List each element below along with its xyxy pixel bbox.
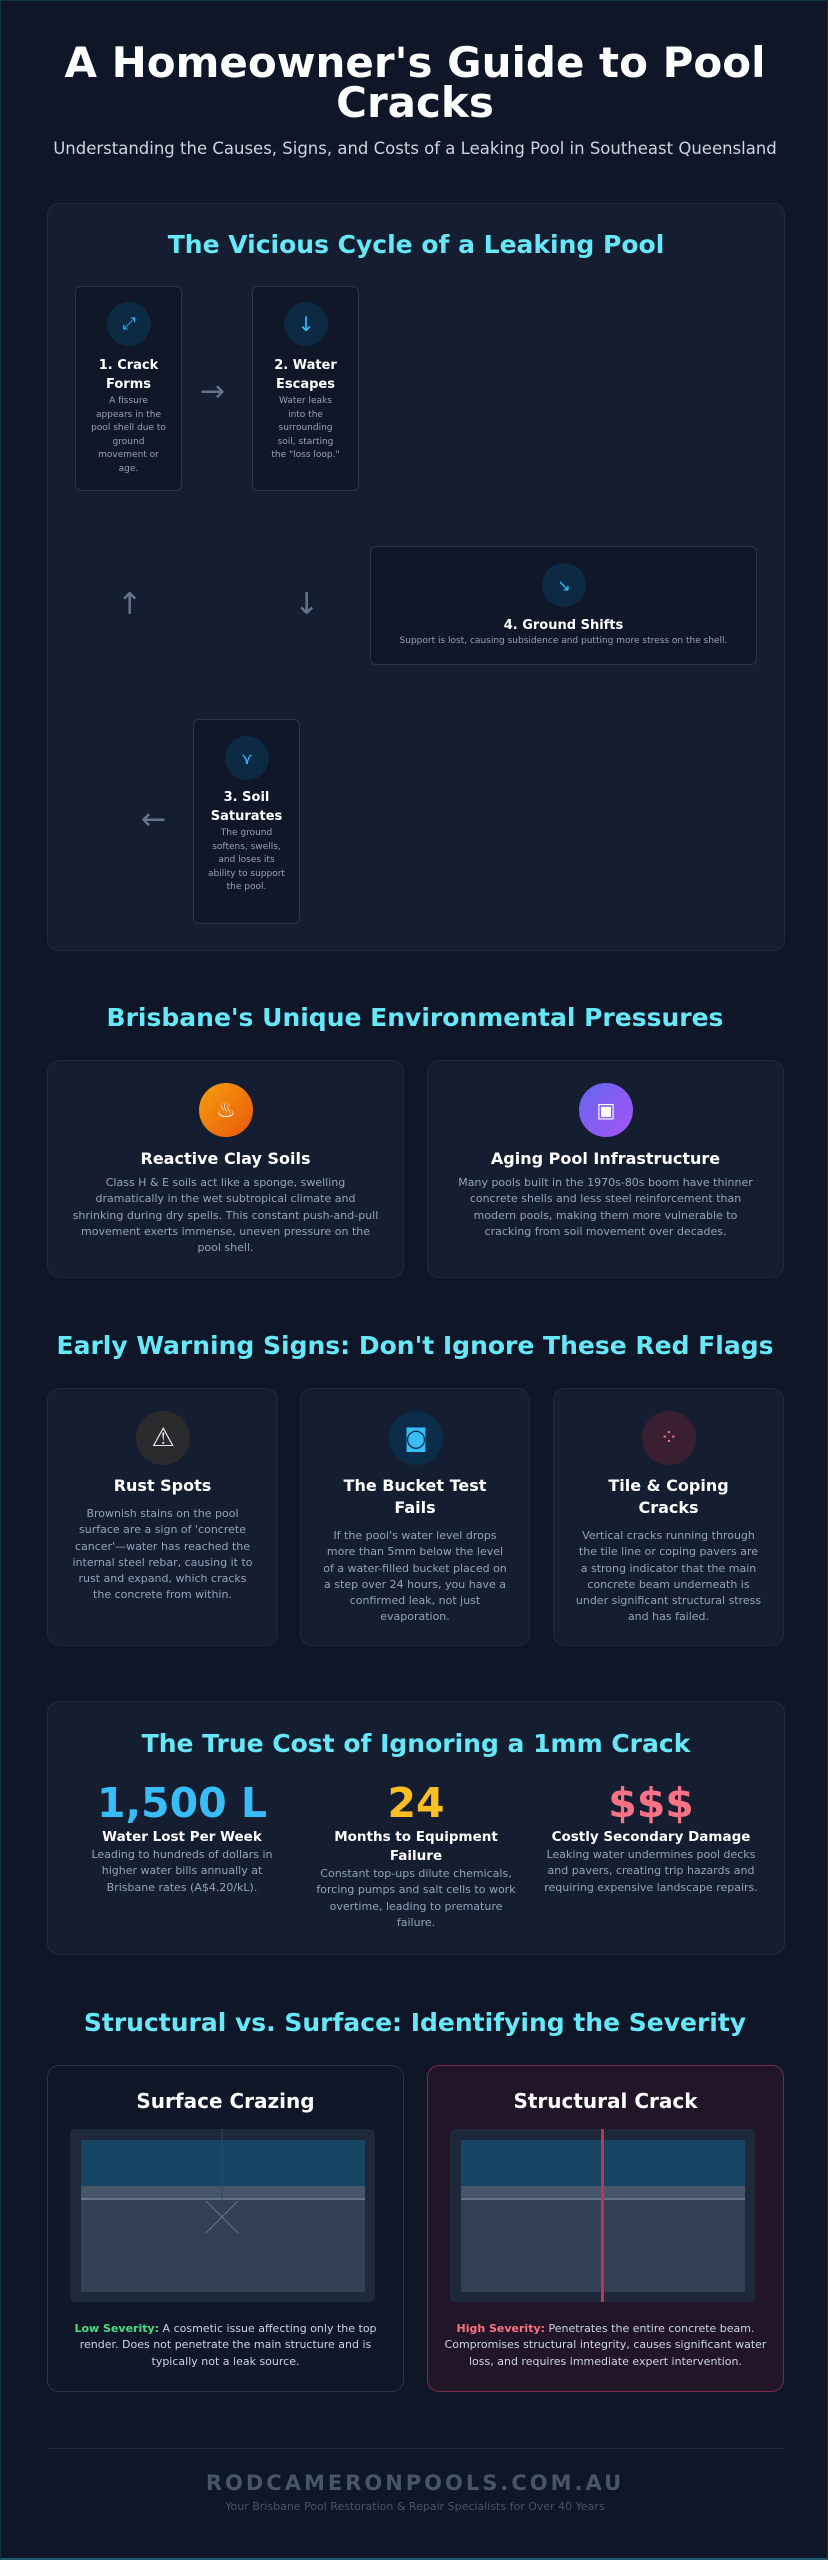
- card: structural crack: High Severity: Penetrates the entire concrete beam. Compromises structural integrity, causes significant water loss, and requires immediate expert intervention.: [445, 2322, 766, 2368]
- arrow down: ↓: [294, 587, 319, 622]
- arrow left: ←: [141, 802, 166, 837]
- icon: bucket: [389, 1411, 443, 1465]
- card: tile cracks: Vertical cracks running through the tile line or coping pavers are a strong indicator that the main concrete beam underneath is under significant structural stress and has failed.: [576, 1529, 761, 1623]
- step 3 card: The ground softens, swells, and loses its ability to support the pool.: [208, 828, 285, 892]
- card: reactive clay soils: Reactive Clay Soils: [140, 1149, 310, 1168]
- icon: trending down: [542, 563, 586, 607]
- card: surface crazing: Surface Crazing: [136, 2089, 315, 2113]
- icon: tiles: ⁘: [660, 1426, 678, 1450]
- heading: environmental pressures: Brisbane's Unique Environmental Pressures: [107, 1003, 723, 1032]
- card: surface crazing: [47, 2065, 404, 2392]
- subtitle: Understanding the Causes, Signs, and Costs of a Leaking Pool in Southeast Queensland: [53, 139, 777, 158]
- card: aging infrastructure: [427, 1060, 784, 1278]
- stat: water lost: 1,500 L: [97, 1779, 267, 1827]
- card: structural crack: Structural Crack: [513, 2089, 698, 2113]
- heading: vicious cycle: The Vicious Cycle of a Leaking Pool: [168, 230, 664, 259]
- card: reactive clay soils: [47, 1060, 404, 1278]
- icon: tiles: [642, 1411, 696, 1465]
- stat: secondary damage: Costly Secondary Damage: [552, 1829, 750, 1845]
- stat: water lost: [91, 1779, 273, 1894]
- icon: warning: [136, 1411, 190, 1465]
- stat: water lost: Water Lost Per Week: [102, 1829, 262, 1845]
- card: surface crazing: Low Severity: A cosmetic issue affecting only the top render. Does not penetrate the main structure and is typically not a leak source.: [74, 2322, 377, 2368]
- icon: fire: ♨: [216, 1098, 236, 1122]
- panel: true cost: [47, 1701, 785, 1955]
- stat: equipment failure: Months to Equipment Failure: [334, 1829, 498, 1864]
- heading: severity: Structural vs. Surface: Identifying the Severity: [84, 2008, 746, 2037]
- diagram: surface crazing: [70, 2129, 375, 2302]
- icon: fire: [199, 1083, 253, 1137]
- icon: down arrow: [284, 302, 328, 346]
- icon: down arrow: ↓: [298, 312, 314, 336]
- card: rust spots: Brownish stains on the pool surface are a sign of 'concrete cancer'—water has reached the internal steel rebar, causing it to rust and expand, which cracks the concrete from within.: [72, 1507, 253, 1601]
- card: rust spots: Rust Spots: [114, 1476, 211, 1495]
- card: structural crack: [427, 2065, 784, 2392]
- icon: warning: ⚠: [151, 1423, 175, 1453]
- panel: vicious cycle: [47, 203, 785, 951]
- stat: equipment failure: 24: [387, 1779, 445, 1827]
- heading: warning signs: Early Warning Signs: Don't Ignore These Red Flags: [56, 1331, 773, 1360]
- arrow right: →: [200, 374, 225, 409]
- icon: calendar: ▣: [597, 1098, 615, 1122]
- icon: expand: [107, 302, 151, 346]
- icon: expand: ⤢: [122, 314, 136, 334]
- step 4 card: [370, 546, 757, 665]
- title: A Homeowner's Guide to Pool Cracks: [64, 38, 766, 127]
- footer tagline: Your Brisbane Pool Restoration & Repair Specialists for Over 40 Years: [225, 2500, 605, 2513]
- card: bucket test: [300, 1388, 530, 1646]
- icon: split: ⋎: [241, 748, 253, 768]
- card: bucket test: The Bucket Test Fails: [344, 1476, 486, 1517]
- stat: equipment failure: Constant top-ups dilute chemicals, forcing pumps and salt cells to work overtime, leading to premature failure.: [316, 1867, 516, 1929]
- step 1 card: A fissure appears in the pool shell due to ground movement or age.: [91, 396, 166, 474]
- stat: secondary damage: Leaking water undermines pool decks and pavers, creating trip hazards and requiring expensive landscape repairs.: [544, 1848, 758, 1894]
- step 4 card: 4. Ground Shifts: [504, 618, 623, 633]
- step 4 card: Support is lost, causing subsidence and putting more stress on the shell.: [400, 636, 727, 646]
- arrow up: ↑: [117, 587, 142, 622]
- diagram: structural crack: [450, 2129, 755, 2302]
- step 2 card: Water leaks into the surrounding soil, starting the "loss loop.": [271, 396, 340, 460]
- card: tile cracks: [553, 1388, 784, 1646]
- step 3 card: [193, 719, 300, 924]
- step 3 card: 3. Soil Saturates: [211, 790, 282, 824]
- stat: water lost: Leading to hundreds of dollars in higher water bills annually at Brisbane rates (A$4.20/kL).: [91, 1848, 273, 1894]
- card: rust spots: [47, 1388, 278, 1646]
- icon: bucket: ◙: [404, 1424, 428, 1452]
- card: reactive clay soils: Class H & E soils act like a sponge, swelling dramatically in the wet subtropical climate and shrinking during dry spells. This constant push-and-pull movement exerts immense, uneven pressure on the pool shell.: [73, 1176, 378, 1254]
- card: tile cracks: Tile & Coping Cracks: [608, 1476, 729, 1517]
- step 2 card: 2. Water Escapes: [274, 358, 337, 392]
- icon: calendar: [579, 1083, 633, 1137]
- card: aging infrastructure: Aging Pool Infrastructure: [491, 1149, 720, 1168]
- stat: secondary damage: $$$: [608, 1779, 694, 1827]
- icon: split: [225, 736, 269, 780]
- stat: equipment failure: [316, 1779, 516, 1929]
- card: aging infrastructure: Many pools built in the 1970s-80s boom have thinner concrete shells and less steel reinforcement than modern pools, making them more vulnerable to cracking from soil movement over decades.: [458, 1176, 753, 1238]
- step 1 card: 1. Crack Forms: [99, 358, 158, 392]
- step 2 card: [252, 286, 359, 491]
- step 1 card: [75, 286, 182, 491]
- icon: trending down: ↘: [557, 576, 571, 594]
- stat: secondary damage: [544, 1779, 758, 1894]
- heading: true cost: The True Cost of Ignoring a 1mm Crack: [142, 1729, 690, 1758]
- card: bucket test: If the pool's water level drops more than 5mm below the level of a water-filled bucket placed on a step over 24 hours, you have a confirmed leak, not just evaporation.: [323, 1529, 507, 1623]
- footer brand: RODCAMERONPOOLS.COM.AU: [206, 2471, 624, 2495]
